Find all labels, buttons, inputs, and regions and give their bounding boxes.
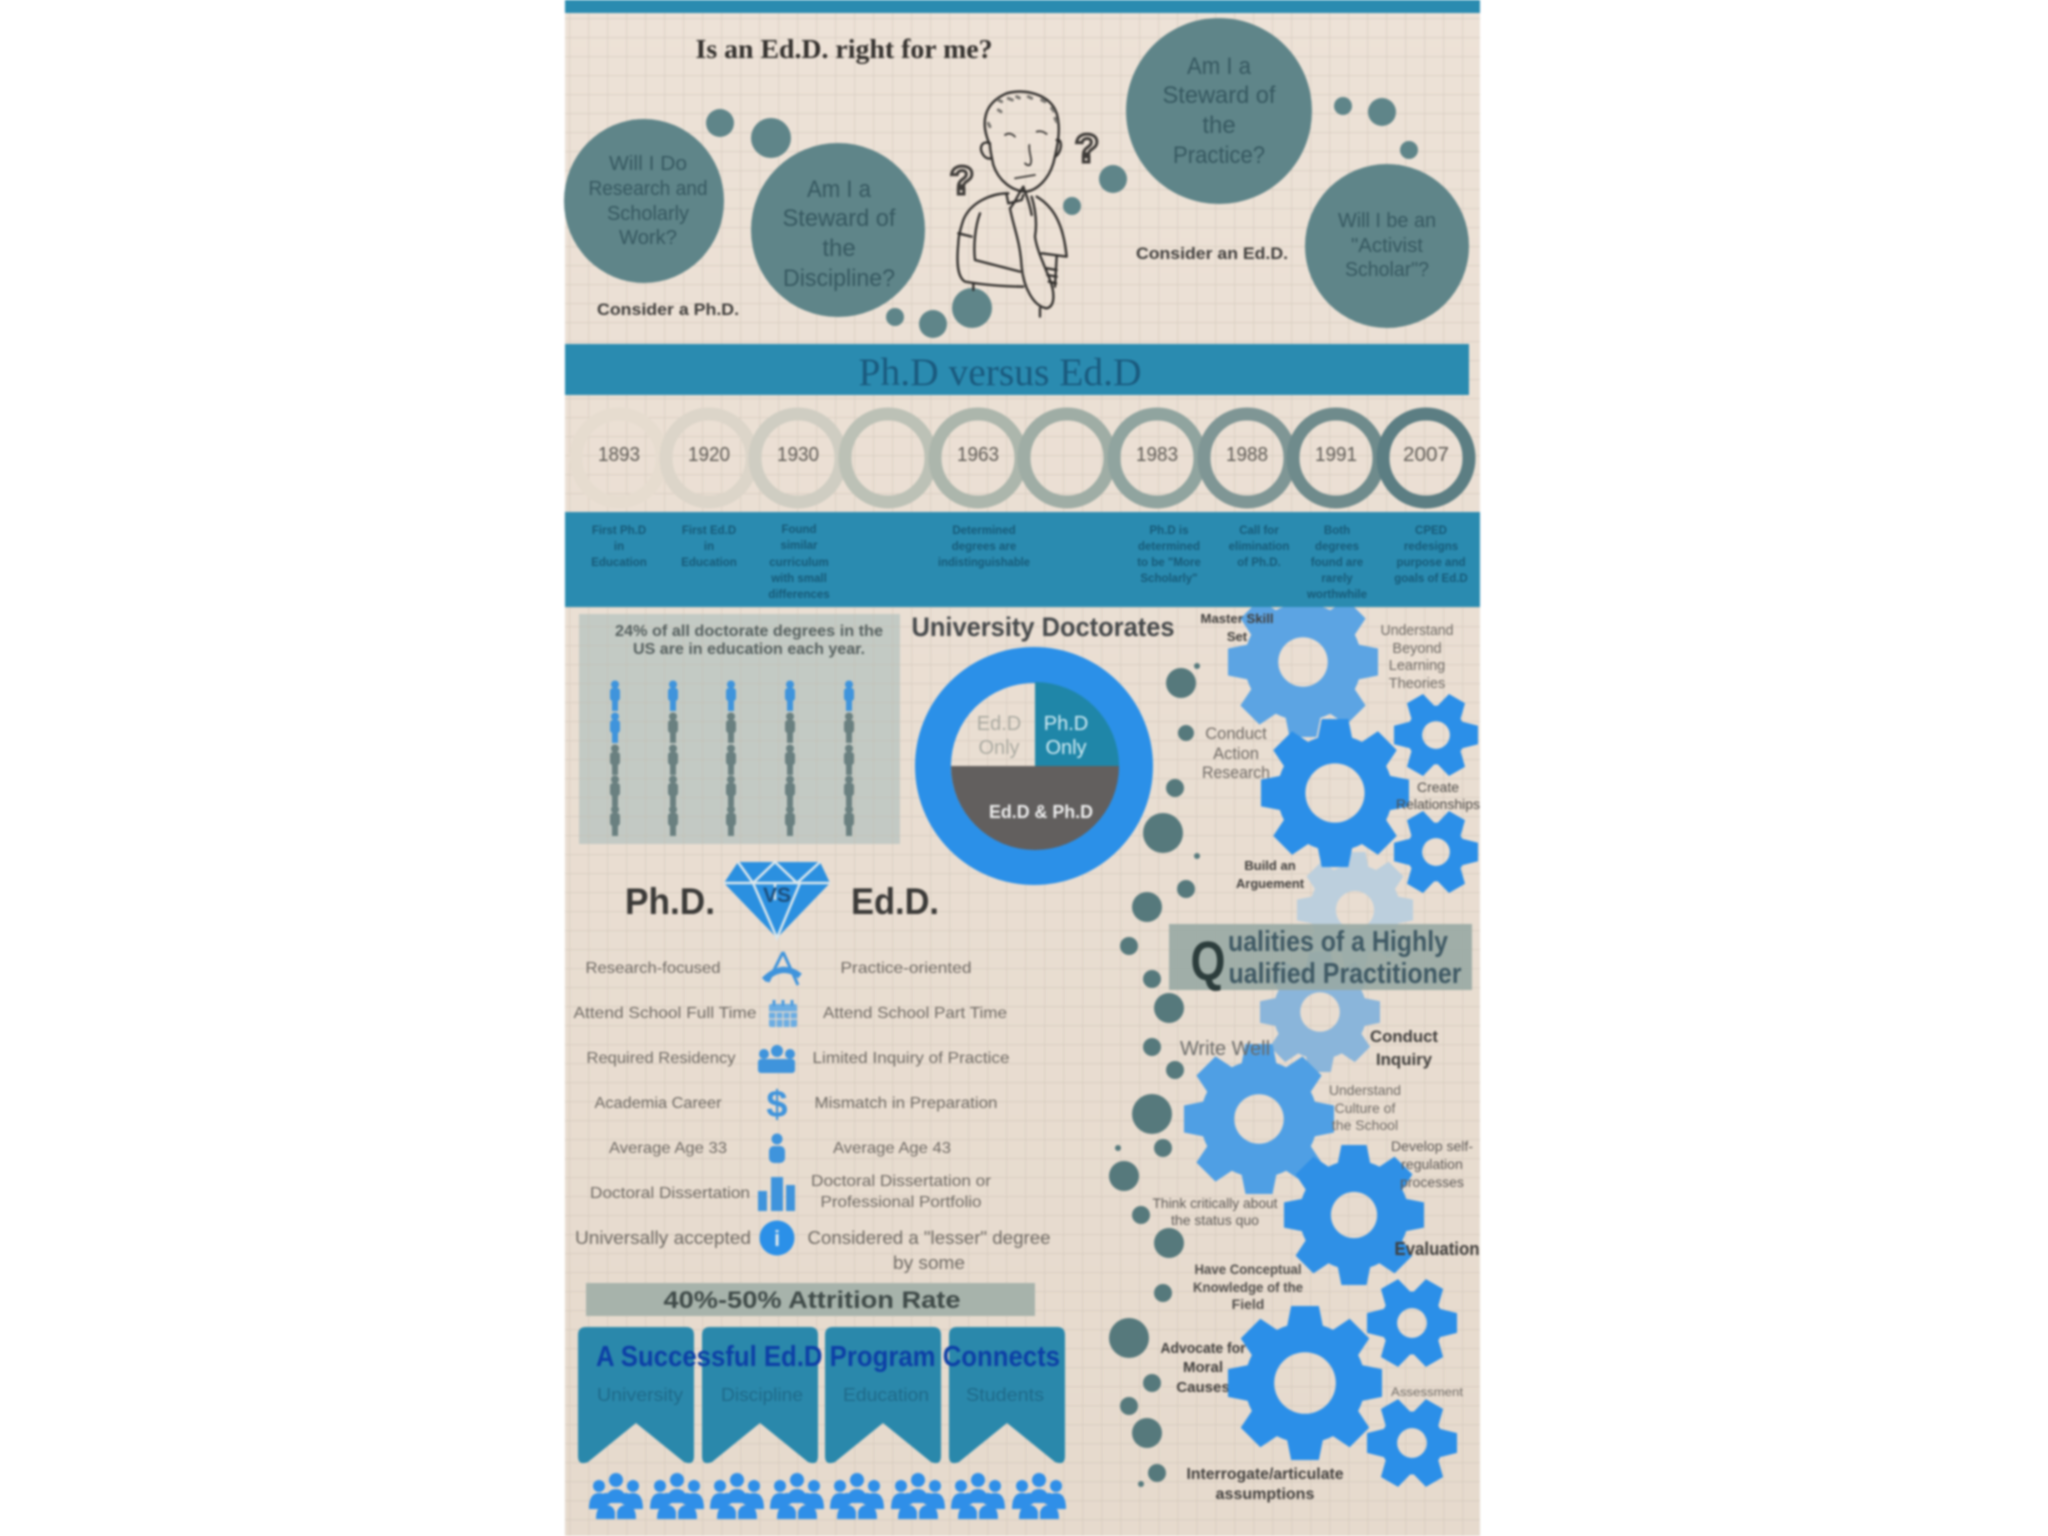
ribbon: University: University: [597, 1385, 683, 1405]
ring 1963: [935, 414, 1021, 502]
drop cap Q: Q: [1190, 929, 1226, 992]
chart: doctorates pie and ring: [933, 665, 1135, 867]
slice label: Ed.D only: Only: [978, 737, 1020, 759]
bubble: research: Scholarly: [607, 203, 689, 225]
bubble: steward of the discipline: the: [822, 235, 856, 262]
heading: Ph.D.: Ph.D.: [625, 881, 715, 922]
ring 1988: [1204, 414, 1290, 502]
bubble: steward of the practice: Steward of: [1162, 82, 1276, 109]
text: advocate for moral causes: Advocate for: [1160, 1340, 1246, 1357]
gear: mid lower: [1184, 1044, 1334, 1194]
row: age: Average Age 33: [609, 1140, 727, 1157]
gear: small second: [1378, 794, 1494, 910]
bubble: activist scholar: [1305, 164, 1469, 328]
event 1988: of Ph.D.: [1237, 557, 1281, 569]
qualities heading box: ualified Practitioner: [1228, 958, 1462, 990]
ribbon: Education: [825, 1327, 941, 1463]
gear: strong top: [1261, 719, 1409, 867]
row: residency: Required Residency: [586, 1050, 736, 1067]
text: create relationships: Create: [1417, 779, 1459, 795]
row: residency: Limited Inquiry of Practice: [812, 1050, 1010, 1067]
text: understand learning theories: Understand: [1380, 623, 1454, 639]
statistic text: US are in education each year.: [633, 641, 865, 658]
icon: bars: [758, 1177, 795, 1211]
event 1963: degrees are: [952, 541, 1016, 553]
text: conceptual knowledge: Field: [1232, 1296, 1264, 1312]
event 1930: Found: [781, 524, 817, 536]
ring 1920: 1920: [688, 444, 730, 466]
text: advocate for moral causes: Moral: [1183, 1359, 1223, 1376]
gear: mid right: [1284, 1145, 1424, 1285]
text: understand learning theories: Learning: [1389, 658, 1445, 674]
comparison table: [574, 952, 1050, 1273]
ribbon: Students: Students: [966, 1385, 1044, 1405]
bubble: activist scholar: "Activist: [1351, 235, 1423, 257]
text: conduct action research: Research: [1202, 764, 1270, 782]
text: conduct action research: Action: [1213, 745, 1259, 763]
event 1991: Both: [1324, 525, 1350, 537]
event 1991: degrees: [1315, 541, 1359, 553]
bubble: activist scholar: Scholar"?: [1345, 259, 1429, 281]
event 1983: Ph.D is: [1150, 525, 1188, 537]
ring 1988: 1988: [1226, 444, 1268, 466]
text: conduct action research: Conduct: [1205, 725, 1267, 743]
qualities heading box: [1169, 924, 1472, 992]
icon: dollar: $: [766, 1084, 788, 1126]
bubble: steward of the discipline: Am I a: [807, 176, 872, 203]
icon: diamond vs: VS: [763, 884, 791, 907]
text: master skill set: Master Skill: [1200, 611, 1274, 626]
banner: Ph.D versus Ed.D: Ph.D versus Ed.D: [858, 351, 1142, 394]
gear: pale upper: [1297, 852, 1413, 968]
panel: 24 percent statistic: [579, 614, 900, 844]
text: understand culture: the School: [1332, 1117, 1398, 1133]
timeline rings: [576, 414, 1469, 502]
bubble: steward of the discipline: [751, 143, 925, 317]
row: focus: Research-focused: [586, 960, 720, 977]
ring 1893: 1893: [598, 444, 640, 466]
text: understand learning theories: Beyond: [1392, 641, 1442, 657]
ring 1893: [576, 414, 662, 502]
bubble: steward of the discipline: Discipline?: [783, 265, 895, 292]
event 1988: Call for: [1239, 525, 1279, 537]
slice label: Ed.D only: Ed.D: [977, 713, 1021, 735]
ring 2007: [1383, 414, 1469, 502]
event 1983: to be "More: [1137, 557, 1201, 569]
ribbon: Students: [949, 1327, 1065, 1463]
event 2007: goals of Ed.D: [1394, 573, 1468, 585]
event 1991: found are: [1311, 557, 1363, 569]
pictogram: people: [610, 680, 854, 836]
illustration: thinking student: ?: [1075, 127, 1099, 171]
row: career: [594, 1084, 998, 1126]
bubble: steward of the discipline: Steward of: [782, 205, 896, 232]
icon: compass: [764, 952, 800, 985]
row: acceptance: [575, 1220, 1050, 1273]
attrition rate bar: [586, 1283, 1035, 1316]
icon: calendar: [769, 1000, 797, 1027]
row: career: Mismatch in Preparation: [814, 1095, 998, 1112]
ribbon: Discipline: [702, 1327, 818, 1463]
slice label: Ph.D only: Only: [1045, 737, 1087, 759]
text: understand culture: Culture of: [1335, 1100, 1395, 1116]
event 1930: similar: [780, 540, 818, 552]
ribbon: Discipline: Discipline: [721, 1385, 803, 1405]
event 1930: differences: [768, 589, 830, 601]
bubble: research: Research and: [588, 178, 708, 200]
ring 1930: [755, 414, 841, 502]
gear: small fourth: [1350, 1381, 1474, 1505]
decorative thought bubbles: [706, 97, 1418, 338]
event 1893: Education: [591, 557, 647, 569]
gear: small third: [1350, 1261, 1474, 1385]
bubble: steward of the practice: the: [1202, 112, 1236, 139]
banner: Ph.D versus Ed.D: [565, 344, 1469, 395]
title: Is an Ed.D. right for me?: [696, 34, 992, 64]
event 1983: Scholarly": [1140, 573, 1198, 585]
row: dissertation: Doctoral Dissertation: [590, 1185, 750, 1202]
icon: diamond vs: [724, 862, 830, 938]
heading: University Doctorates: University Doctorates: [912, 612, 1174, 642]
text: conduct inquiry: Inquiry: [1376, 1050, 1433, 1069]
event 1991: worthwhile: [1306, 589, 1367, 601]
text: self-regulation: Develop self-: [1391, 1138, 1473, 1154]
row: focus: [586, 952, 972, 985]
ring 1920: [666, 414, 752, 502]
text: build an argument: Arguement: [1236, 876, 1305, 891]
row: acceptance: Considered a "lesser" degree: [808, 1228, 1050, 1248]
ring 1983: 1983: [1136, 444, 1178, 466]
gear: light middle: [1260, 952, 1380, 1072]
event 1991: rarely: [1321, 573, 1353, 585]
event 2007: redesigns: [1404, 541, 1458, 553]
illustration: thinking student: [950, 92, 1099, 317]
event 1983: determined: [1138, 541, 1200, 553]
event 1920: First Ed.D: [682, 525, 736, 537]
text: understand culture: Understand: [1329, 1082, 1401, 1098]
dotted bubble trail: [1109, 663, 1200, 1487]
bubble: activist scholar: Will I be an: [1338, 210, 1436, 232]
bubble: research: Will I Do: [609, 153, 687, 175]
text: think critically: Think critically about: [1152, 1195, 1278, 1211]
icon: info: [760, 1220, 794, 1256]
illustration: thinking student: ?: [950, 159, 974, 203]
ribbon: Education: Education: [843, 1385, 929, 1405]
text: conduct inquiry: Conduct: [1370, 1027, 1438, 1046]
event 1963: indistinguishable: [938, 557, 1030, 569]
event 1893: in: [614, 541, 624, 553]
bubble: steward of the practice: Am I a: [1187, 53, 1252, 80]
ring 1991: [1293, 414, 1379, 502]
text: understand learning theories: Theories: [1389, 676, 1445, 692]
slice label: both: Ed.D & Ph.D: [989, 802, 1093, 822]
text: self-regulation: regulation: [1401, 1156, 1463, 1172]
ribbons: program connections: [578, 1327, 1065, 1463]
page background panel: [565, 0, 1480, 1536]
event 1963: Determined: [952, 525, 1016, 537]
heading: Ed.D.: Ed.D.: [851, 881, 939, 922]
qualities heading box: ualities of a Highly: [1228, 926, 1448, 958]
text: build an argument: Build an: [1244, 858, 1296, 873]
timeline description band: [565, 512, 1480, 607]
row: attendance: Attend School Part Time: [823, 1005, 1007, 1022]
ring 1983: [1114, 414, 1200, 502]
row: residency: [586, 1045, 1010, 1073]
bubble: research: Work?: [619, 227, 677, 249]
text: self-regulation: processes: [1400, 1174, 1464, 1190]
row: focus: Practice-oriented: [840, 960, 972, 977]
event 2007: purpose and: [1396, 557, 1466, 569]
icons: groups of people: [589, 1473, 1066, 1519]
text: think critically: the status quo: [1171, 1212, 1259, 1228]
ring blank: [845, 414, 931, 502]
row: acceptance: Universally accepted: [575, 1228, 751, 1248]
caption: consider an Ed.D.: Consider an Ed.D.: [1136, 244, 1288, 263]
text: conceptual knowledge: Knowledge of the: [1193, 1279, 1303, 1295]
event 1920: in: [704, 541, 714, 553]
bubble: steward of the practice: [1126, 18, 1312, 204]
row: attendance: [574, 1000, 1007, 1027]
ring blank: [1024, 414, 1110, 502]
row: age: [609, 1134, 951, 1163]
gear: small top: [1378, 677, 1494, 793]
row: age: Average Age 43: [833, 1140, 951, 1157]
slice label: Ph.D only: Ph.D: [1044, 713, 1088, 735]
row: dissertation: Professional Portfolio: [820, 1194, 982, 1211]
icon: people: [758, 1045, 795, 1073]
top bar: [565, 0, 1480, 13]
text: write well: Write Well: [1180, 1038, 1270, 1060]
text: master skill set: Set: [1227, 629, 1248, 644]
caption: consider a Ph.D.: Consider a Ph.D.: [597, 300, 739, 319]
row: attendance: Attend School Full Time: [574, 1005, 757, 1022]
event 2007: CPED: [1415, 525, 1447, 537]
text: advocate for moral causes: Causes: [1176, 1379, 1230, 1396]
ring 1991: 1991: [1315, 444, 1357, 466]
bubble: steward of the practice: Practice?: [1173, 142, 1265, 169]
gear: light top: [1228, 587, 1378, 737]
ring 1930: 1930: [777, 444, 819, 466]
text: conceptual knowledge: Have Conceptual: [1194, 1261, 1302, 1277]
ring 2007: 2007: [1403, 444, 1449, 466]
event 1893: First Ph.D: [592, 525, 646, 537]
row: dissertation: Doctoral Dissertation or: [811, 1173, 992, 1190]
gear: bottom large: [1228, 1306, 1382, 1460]
icon: info: i: [774, 1226, 780, 1251]
row: career: Academia Career: [594, 1095, 722, 1112]
bubble: research: [564, 119, 724, 283]
text: interrogate assumptions: Interrogate/articulate: [1186, 1466, 1344, 1483]
event 1920: Education: [681, 557, 737, 569]
heading: successful program: A Successful Ed.D Program Connects: [596, 1341, 1060, 1373]
text: create relationships: Relationships: [1396, 796, 1480, 812]
ring 1963: 1963: [957, 444, 999, 466]
text: assessment: Assessment: [1391, 1385, 1464, 1399]
text: interrogate assumptions: assumptions: [1216, 1486, 1314, 1503]
ribbon: University: [578, 1327, 694, 1463]
statistic text: 24% of all doctorate degrees in the: [615, 623, 883, 640]
row: dissertation: [590, 1173, 992, 1211]
text: evaluation: Evaluation: [1394, 1239, 1480, 1259]
attrition rate bar: 40%-50% Attrition Rate: [664, 1287, 960, 1314]
row: acceptance: by some: [893, 1253, 965, 1273]
event 1930: curriculum: [769, 557, 829, 569]
event 1930: with small: [770, 573, 827, 585]
event 1988: elimination: [1229, 541, 1289, 553]
icon: person: [769, 1134, 785, 1163]
